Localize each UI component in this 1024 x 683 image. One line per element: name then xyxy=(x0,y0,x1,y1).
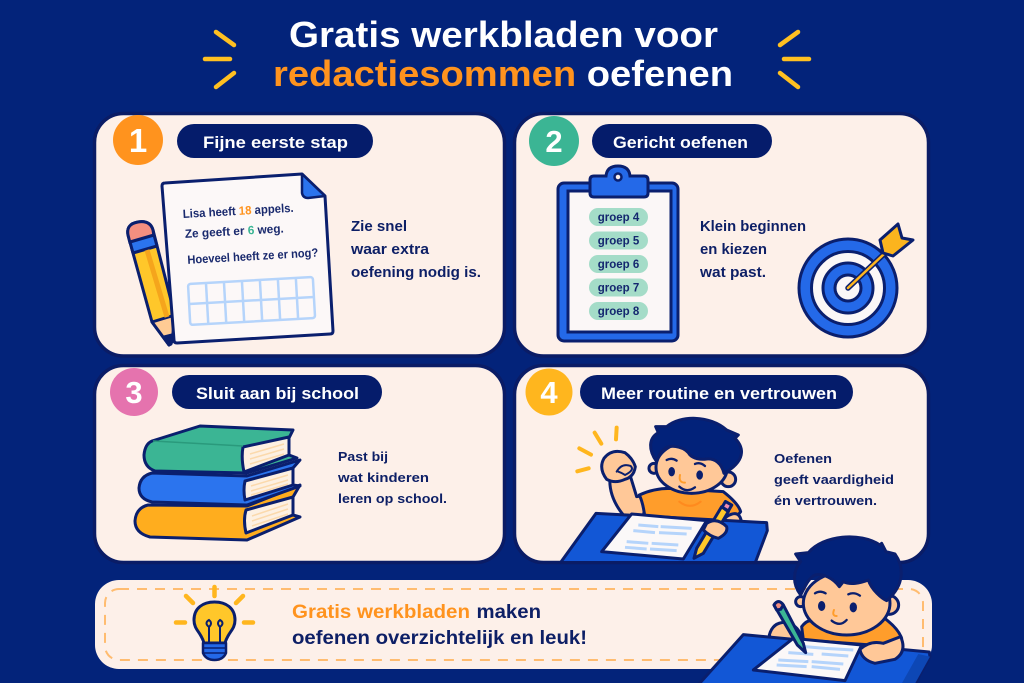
badge 3: 3 xyxy=(125,375,143,410)
worksheet xyxy=(753,638,862,681)
hair xyxy=(795,537,901,601)
panel 1 text: oefening nodig is. xyxy=(351,265,481,281)
title: Gratis werkbladen voor xyxy=(289,14,718,55)
panel 4: Meer routine en vertrouwen xyxy=(514,366,928,563)
answer grid xyxy=(188,277,315,325)
face xyxy=(656,441,727,493)
worksheet story text: Ze geeft er 6 weg. xyxy=(185,221,284,241)
callout text xyxy=(292,602,587,649)
grade pills: groep 8 xyxy=(598,306,640,318)
hand xyxy=(703,521,727,538)
heading pill 3: Sluit aan bij school xyxy=(196,384,359,403)
icon: pencil xyxy=(128,222,175,345)
panel 3 text: Past bij xyxy=(338,449,388,464)
desk xyxy=(560,513,767,563)
title: redactiesommen oefenen xyxy=(273,53,733,94)
panel 1 text: Zie snel xyxy=(351,219,407,235)
ears xyxy=(796,597,806,607)
ears xyxy=(649,463,659,473)
panel 4 text: Oefenen xyxy=(774,451,832,466)
heading pill 3 xyxy=(172,375,382,409)
icon: left sparkle lines xyxy=(205,32,234,87)
heading pill 4 xyxy=(580,375,853,409)
panel 2 text: Klein beginnen xyxy=(700,219,806,235)
icon: light bulb xyxy=(176,587,253,660)
blue book xyxy=(139,460,300,505)
badge 3 xyxy=(110,368,158,416)
worksheet story text: Hoeveel heeft ze er nog? xyxy=(187,246,319,267)
illustration: child writing at desk xyxy=(697,537,930,683)
hair xyxy=(651,418,741,473)
pencil xyxy=(694,507,728,558)
panel 2 text: wat past. xyxy=(699,265,766,281)
badge 2 xyxy=(529,116,579,166)
clipboard xyxy=(558,166,678,341)
callout banner xyxy=(95,580,932,669)
icon: target with arrow xyxy=(799,224,913,337)
worksheet xyxy=(602,514,707,559)
panel 2: Gericht oefenen xyxy=(514,114,928,356)
heading pill 2: Gericht oefenen xyxy=(613,133,748,152)
other hand xyxy=(860,637,903,663)
shirt xyxy=(802,617,902,647)
desk xyxy=(697,635,930,683)
badge 4 xyxy=(526,368,572,416)
writing hand xyxy=(768,621,802,638)
heading pill 1: Fijne eerste stap xyxy=(203,133,348,152)
orange book xyxy=(135,485,300,540)
illustration: child cheering at desk xyxy=(560,418,767,563)
eyes and mouth xyxy=(668,467,675,476)
grade pills: groep 4 xyxy=(598,212,640,224)
panel 3 text: wat kinderen xyxy=(337,470,429,485)
fist xyxy=(602,451,635,482)
callout text: Gratis werkbladen xyxy=(292,602,470,623)
badge 1: 1 xyxy=(129,122,147,159)
worksheet xyxy=(162,174,333,343)
shirt xyxy=(638,487,742,518)
heading pill 2 xyxy=(592,124,772,158)
panel 1 text: waar extra xyxy=(350,242,430,258)
grade pills xyxy=(589,208,648,320)
icon: stack of books xyxy=(135,426,300,540)
grade pills: groep 7 xyxy=(598,282,639,294)
worksheet story text: Lisa heeft 18 appels. xyxy=(182,201,294,221)
panel 4 text: geeft vaardigheid xyxy=(774,472,894,487)
pencil xyxy=(774,602,806,653)
callout text: maken xyxy=(476,602,541,623)
face xyxy=(803,572,890,635)
panel 1 text xyxy=(350,219,481,281)
raised arm xyxy=(608,476,643,514)
cheer lines xyxy=(577,428,617,471)
green book xyxy=(144,426,297,473)
panel 2 text xyxy=(699,219,806,281)
icon: right sparkle lines xyxy=(780,32,809,87)
worksheet story text xyxy=(182,200,319,267)
panel 4 text xyxy=(774,451,894,508)
eyes, brows and mouth xyxy=(818,601,825,611)
panel 2 text: en kiezen xyxy=(700,242,767,258)
heading pill 1 xyxy=(177,124,373,158)
far arm xyxy=(726,512,743,520)
badge 4: 4 xyxy=(540,375,558,410)
panel 4 text: én vertrouwen. xyxy=(774,493,877,508)
heading pill 4: Meer routine en vertrouwen xyxy=(601,385,837,403)
callout text: oefenen overzichtelijk en leuk! xyxy=(292,628,587,649)
badge 1 xyxy=(113,115,163,165)
badge 2: 2 xyxy=(545,124,563,159)
grade pills: groep 6 xyxy=(598,259,639,271)
panel 3: Sluit aan bij school xyxy=(94,366,504,562)
panel 3 text xyxy=(337,449,447,506)
panel 3 text: leren op school. xyxy=(338,491,447,506)
infographic canvas xyxy=(92,20,932,683)
grade pills: groep 5 xyxy=(598,236,640,248)
title xyxy=(273,14,733,94)
panel 1: Fijne eerste stap xyxy=(94,114,504,356)
